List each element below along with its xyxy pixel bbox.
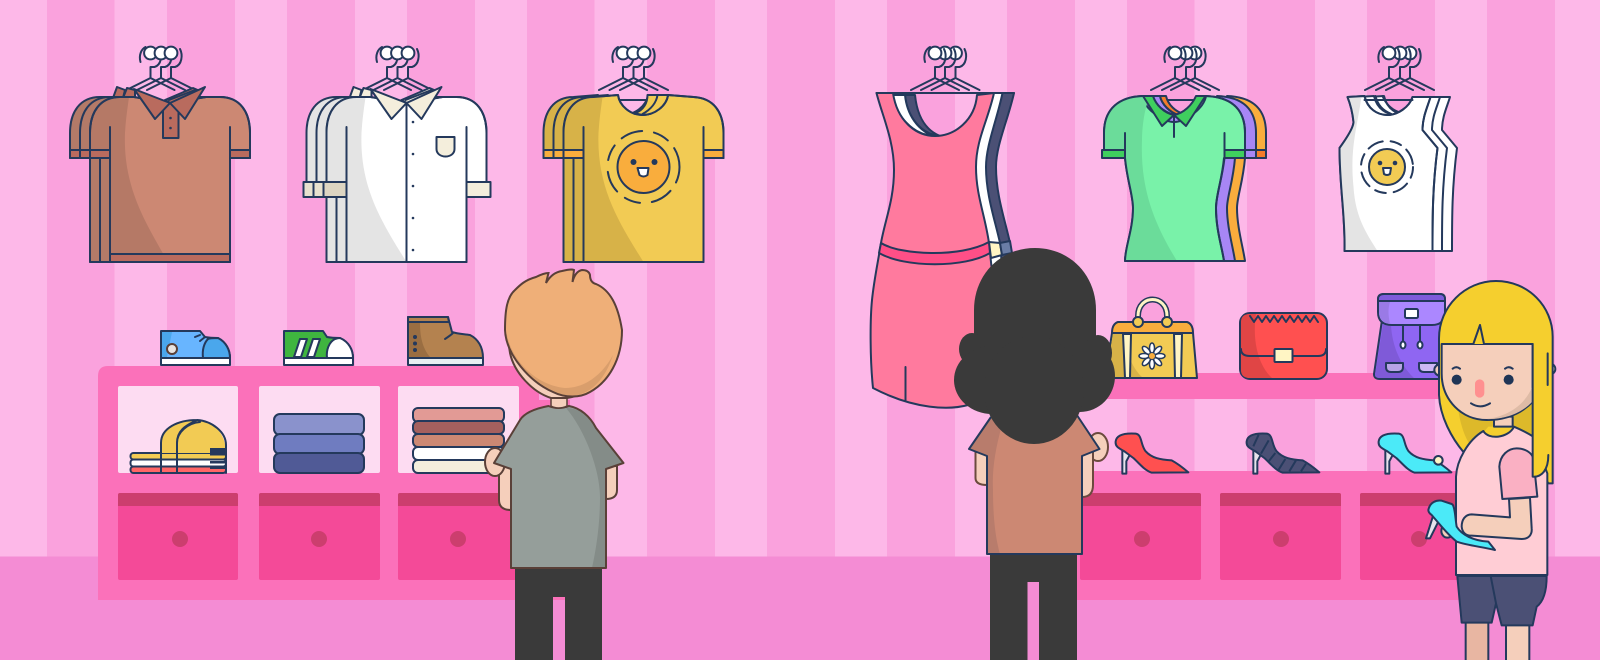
pink dress on hangers <box>871 47 1016 408</box>
girl: legs <box>1466 620 1529 660</box>
man: neck <box>551 396 567 408</box>
flower <box>1139 343 1165 369</box>
drawer 2 <box>259 493 380 580</box>
cyan high heel <box>1379 434 1451 474</box>
yellow t-shirt <box>544 95 724 262</box>
man: hair <box>505 270 622 396</box>
dress back layers <box>970 93 1016 300</box>
blue sneaker <box>161 331 230 365</box>
white shirt <box>304 87 490 262</box>
cabinet left <box>98 366 570 600</box>
cubby: blue folded clothes <box>259 386 380 473</box>
brown boot <box>408 317 483 365</box>
girl holding a shoe <box>1426 281 1555 660</box>
woman: hair <box>954 248 1115 444</box>
girl: fringe spike <box>1473 325 1484 344</box>
shelf right <box>1040 373 1460 399</box>
man: shirt <box>494 406 624 568</box>
girl: shaded hair under chin <box>1458 403 1533 447</box>
neck lining <box>893 95 940 136</box>
girl: front hair lock <box>1533 344 1548 477</box>
yellow sun t-shirt on hangers <box>544 47 724 262</box>
drawer 4 <box>1080 493 1201 580</box>
purple layer <box>1115 96 1256 261</box>
white tank top on hangers <box>1340 47 1457 251</box>
girl: hand <box>1441 524 1453 538</box>
floor <box>0 556 1600 660</box>
white shirt on hangers <box>304 47 490 262</box>
cubby: multicolour folded clothes <box>398 386 519 473</box>
green polo body <box>1102 96 1245 261</box>
woman: shirt <box>969 413 1100 554</box>
sun emblem <box>608 131 680 203</box>
tank front <box>1340 96 1438 251</box>
man: arms and hand <box>485 448 617 510</box>
navy high heel <box>1247 434 1319 474</box>
girl: face <box>1442 344 1533 420</box>
hangers <box>911 47 980 90</box>
man looking at clothes <box>485 270 624 660</box>
sleeve cuff purple <box>1235 150 1256 158</box>
woman: arms and hand <box>976 433 1108 497</box>
girl: arm <box>1462 498 1532 539</box>
red high heel <box>1116 434 1188 474</box>
woman looking at dress <box>954 248 1115 660</box>
polo shirt <box>70 87 250 262</box>
drawer 6 <box>1360 493 1481 580</box>
tank layer mid <box>1349 96 1447 251</box>
orange layer <box>1125 96 1266 261</box>
girl: neck <box>1494 417 1513 427</box>
drawer 3 <box>398 493 519 580</box>
tank layer far <box>1359 96 1457 251</box>
purple backpack <box>1374 294 1445 379</box>
dress body <box>871 93 995 408</box>
held high heel <box>1426 501 1495 550</box>
hangers <box>599 47 668 90</box>
cabinet right <box>1040 471 1481 600</box>
green polo on hangers <box>1102 47 1266 261</box>
dress white layer <box>970 93 1005 300</box>
man: trousers <box>515 566 602 660</box>
green sneaker <box>284 331 353 365</box>
girl: back hair <box>1439 281 1553 483</box>
girl: ears <box>1434 364 1555 376</box>
red purse <box>1240 313 1327 379</box>
sun emblem <box>1361 141 1413 193</box>
drawer 5 <box>1220 493 1341 580</box>
brown polo on hangers <box>70 47 250 262</box>
girl: shorts <box>1457 576 1547 625</box>
hangers <box>126 47 195 90</box>
cubby: hats <box>118 386 238 473</box>
sleeve cuffs back <box>1245 150 1266 158</box>
girl: sleeve <box>1499 448 1537 499</box>
girl: t-shirt <box>1456 427 1547 575</box>
belt <box>879 242 990 264</box>
yellow handbag <box>1105 300 1197 378</box>
hangers <box>1151 47 1219 90</box>
drawer 1 <box>118 493 238 580</box>
hangers <box>1365 47 1434 90</box>
woman: trousers <box>990 552 1077 660</box>
hangers <box>363 47 432 90</box>
man: head <box>508 340 612 398</box>
